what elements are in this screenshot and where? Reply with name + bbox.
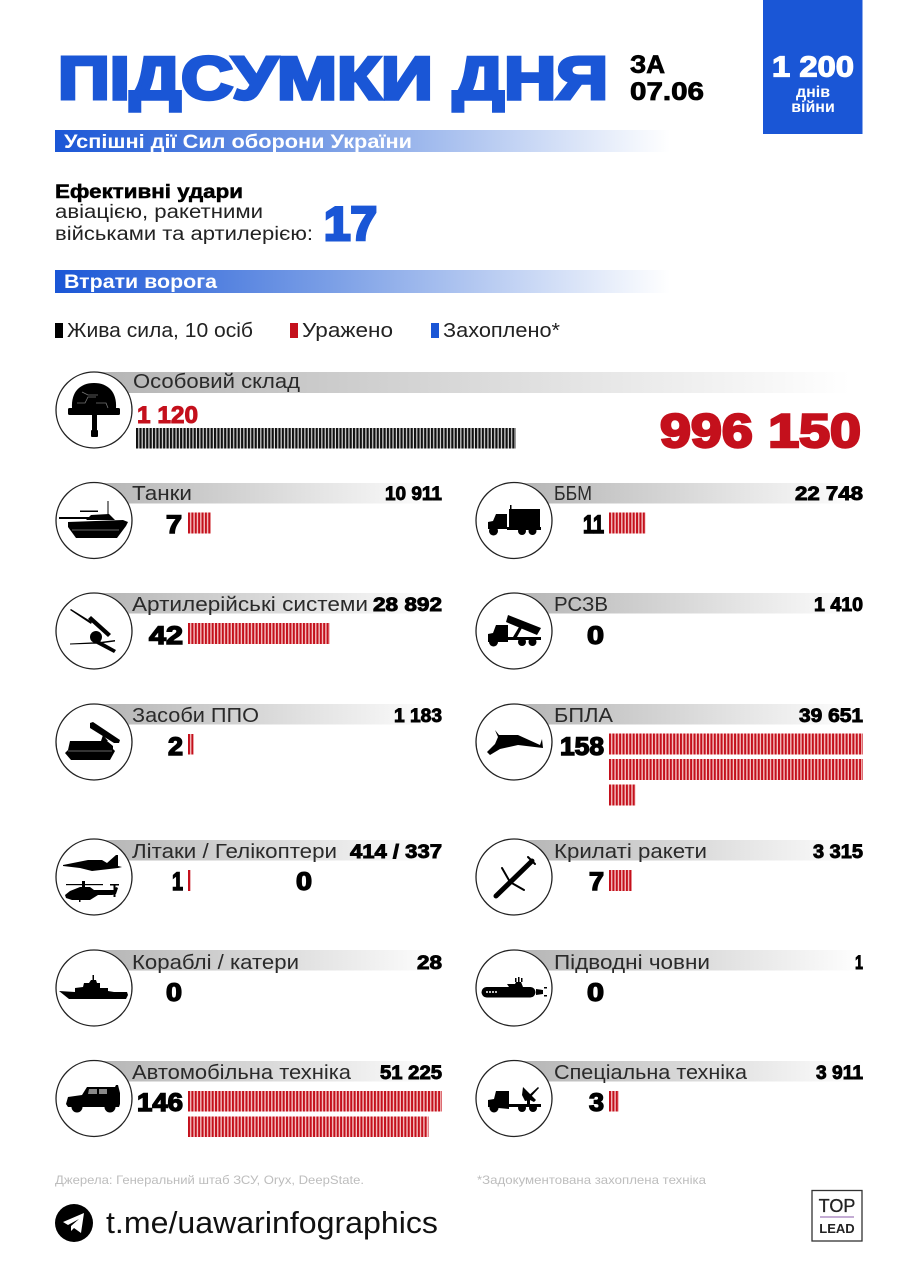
row: aircraft and helicopters: 1	[172, 868, 183, 896]
row: personnel: 1 120	[137, 402, 198, 429]
effective strikes text	[55, 182, 313, 245]
row: ships: 28	[417, 953, 442, 974]
row: special equipment: 3 911	[816, 1063, 863, 1084]
date: ЗА	[630, 51, 665, 79]
row: submarines: Підводні човни	[554, 952, 710, 974]
row: artillery: Артилерійські системи	[132, 594, 368, 616]
row: cruise missiles: 3 315	[813, 842, 863, 863]
section header: enemy losses	[55, 270, 670, 293]
losses bar	[609, 512, 646, 534]
effective strikes text: Ефективні удари	[55, 182, 243, 203]
days of war badge: війни	[791, 99, 835, 116]
row: MLRS	[476, 593, 863, 669]
row: UAV: БПЛА	[554, 705, 614, 727]
logo: top lead	[812, 1190, 862, 1241]
legend	[55, 320, 560, 342]
icon: telegram	[55, 1204, 93, 1242]
row: special equipment: 3	[589, 1089, 604, 1117]
row: tanks: 7	[166, 511, 182, 539]
row: IFV: ББМ	[554, 483, 592, 505]
days of war badge: 1 200	[772, 52, 854, 84]
row: vehicles: 51 225	[380, 1063, 442, 1084]
row: air defence: Засоби ППО	[132, 705, 259, 727]
row: UAV: 39 651	[799, 706, 863, 727]
icon: jeep	[66, 1085, 120, 1112]
losses bar	[609, 870, 632, 891]
row: MLRS: 0	[587, 622, 604, 650]
row: special equipment	[476, 1060, 863, 1136]
icon: armoured truck	[488, 505, 541, 536]
row: IFV: 11	[583, 511, 604, 539]
losses bars	[609, 734, 863, 806]
row: cruise missiles: 7	[589, 868, 604, 896]
icon: howitzer	[70, 609, 116, 653]
row: MLRS: 1 410	[814, 595, 863, 616]
effective strikes text: авіацією, ракетними	[55, 202, 263, 223]
row: tanks	[56, 482, 442, 558]
legend: Жива сила, 10 осіб	[67, 320, 253, 342]
row: IFV	[476, 482, 863, 558]
title: ПІДСУМКИ ДНЯ	[58, 45, 608, 112]
row: UAV	[476, 704, 863, 806]
row: special equipment: Спеціальна техніка	[554, 1062, 748, 1084]
legend: Захоплено*	[443, 320, 560, 342]
row: artillery	[56, 593, 442, 669]
icon: radar truck	[488, 1087, 541, 1112]
date	[630, 51, 704, 106]
row: ships	[56, 950, 442, 1026]
icon: submarine	[482, 977, 547, 998]
losses bar	[609, 1091, 619, 1112]
row: UAV: 158	[560, 733, 604, 761]
row: aircraft and helicopters: Літаки / Гелікоптери	[132, 841, 337, 863]
effective strikes text: військами та артилерією:	[55, 224, 313, 245]
losses bar	[188, 623, 330, 644]
row: cruise missiles: Крилаті ракети	[554, 841, 707, 863]
section header: successful actions: Успішні дії Сил оборони України	[64, 132, 412, 153]
row: aircraft and helicopters: 0	[296, 868, 312, 896]
row: personnel: 996 150	[660, 404, 861, 457]
row: vehicles: 146	[137, 1089, 183, 1117]
row: artillery: 42	[149, 622, 183, 650]
row: ships: 0	[166, 979, 182, 1007]
section header: successful actions	[55, 130, 670, 153]
row: vehicles	[56, 1060, 442, 1137]
row: IFV: 22 748	[795, 484, 863, 505]
losses bar	[188, 734, 194, 754]
days of war badge	[763, 0, 862, 134]
icon: cruise missile	[496, 857, 535, 896]
days of war badge: днів	[796, 84, 830, 101]
row: artillery: 28 892	[373, 595, 442, 616]
strikes number: 17	[324, 197, 377, 250]
row: submarines	[476, 950, 863, 1026]
row: aircraft and helicopters: 414 / 337	[350, 842, 442, 863]
row: submarines: 0	[587, 979, 604, 1007]
row: air defence: 1 183	[394, 706, 442, 727]
personnel bar	[136, 428, 516, 448]
losses bar	[188, 512, 211, 534]
row: MLRS: РСЗВ	[554, 594, 608, 616]
losses bars	[188, 1091, 442, 1137]
icon: helmet	[68, 383, 120, 437]
icon: tank	[59, 501, 128, 538]
losses bar	[188, 870, 190, 891]
row: submarines: 1	[855, 953, 863, 974]
row: air defence: 2	[168, 733, 183, 761]
row: personnel: Особовий склад	[133, 371, 300, 393]
row: vehicles: Автомобільна техніка	[132, 1062, 352, 1084]
icon: rocket launcher truck	[488, 615, 541, 646]
row: personnel	[56, 371, 861, 457]
icon: helicopter	[65, 881, 119, 902]
icon: warship	[59, 975, 128, 999]
telegram link: t.me/uawarinfographics	[106, 1205, 438, 1240]
footnote: captured equipment: *Задокументована захоплена техніка	[477, 1173, 706, 1187]
icon: jet	[63, 855, 122, 871]
row: tanks: Танки	[132, 483, 192, 505]
footnote: sources: Джерела: Генеральний штаб ЗСУ, Oryx, DeepState.	[55, 1173, 364, 1187]
row: aircraft and helicopters	[56, 839, 442, 915]
section header: enemy losses: Втрати ворога	[64, 272, 217, 293]
row: cruise missiles	[476, 839, 863, 915]
icon: SAM launcher	[65, 722, 120, 760]
date: 07.06	[630, 78, 704, 106]
logo: top lead: TOP	[819, 1196, 855, 1216]
row: air defence	[56, 704, 442, 780]
logo: top lead: LEAD	[819, 1221, 855, 1236]
row: ships: Кораблі / катери	[132, 952, 299, 974]
row: tanks: 10 911	[385, 484, 442, 505]
icon: drone	[487, 730, 543, 755]
legend: Уражено	[302, 320, 393, 342]
